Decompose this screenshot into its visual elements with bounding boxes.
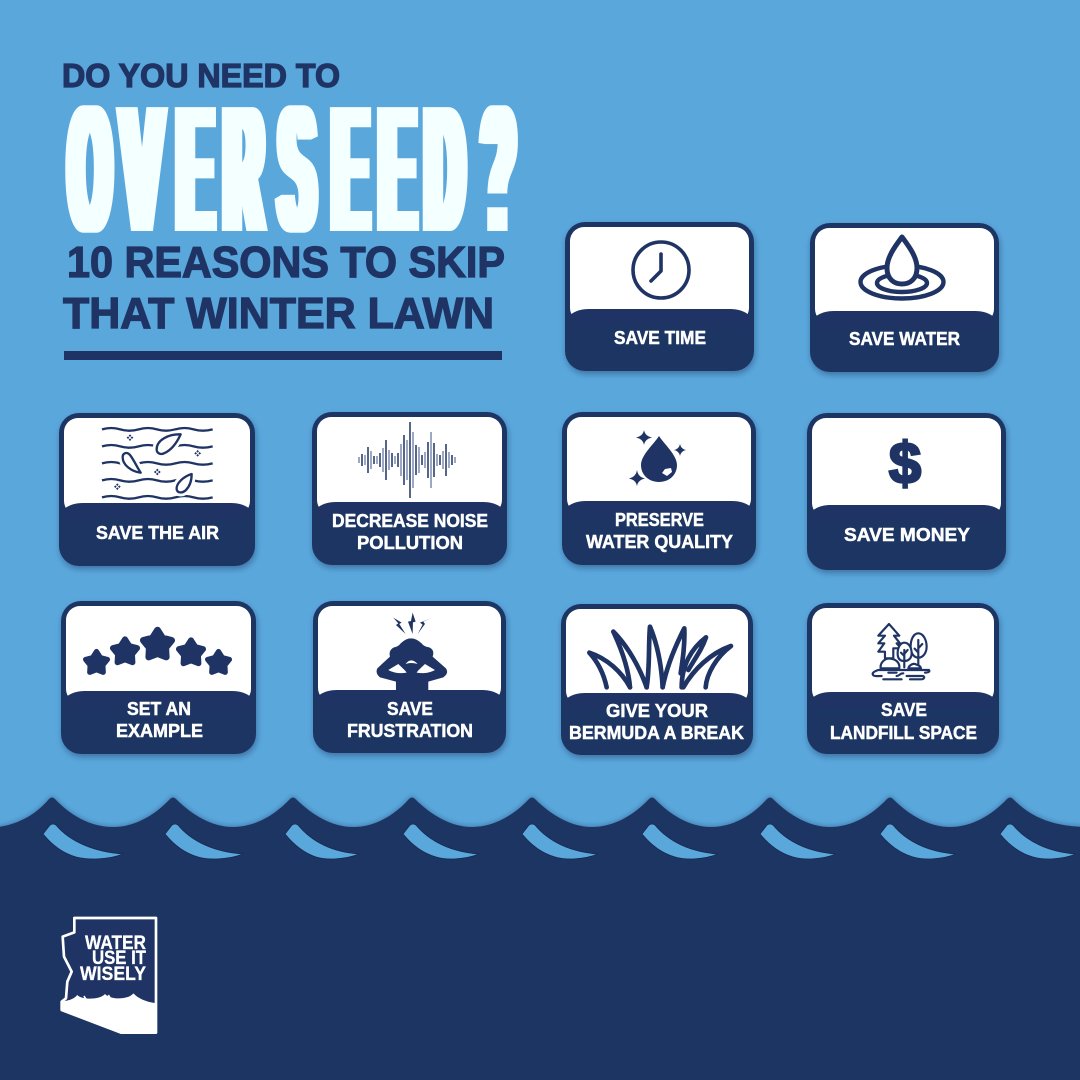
label: save frustration: [347, 698, 473, 741]
label: save water: SAVE WATER: [849, 328, 960, 349]
heading: do you need to: DO YOU NEED TO: [62, 57, 340, 94]
label: save frustration: SAVE: [387, 698, 433, 719]
label: give your bermuda a break: BERMUDA A BREAK: [569, 722, 745, 743]
subheading line one: 10 REASONS TO SKIP: [67, 238, 505, 287]
label: preserve water quality: [586, 509, 734, 552]
title rule: [64, 351, 502, 360]
icon: frustrated person: [377, 613, 447, 690]
card: save time: [565, 222, 754, 371]
icon: air waves and leaves: [102, 428, 213, 499]
label: decrease noise pollution: [332, 510, 488, 553]
title block: [62, 57, 514, 360]
logo: water use it wisely: [62, 918, 157, 1033]
water waves: [0, 798, 1080, 1080]
label: preserve water quality: PRESERVE: [615, 509, 704, 530]
heading: overseed: O: [70, 69, 110, 270]
card: save landfill space: [807, 603, 999, 754]
label: save time: SAVE TIME: [614, 327, 706, 348]
card: set an example: [61, 601, 256, 754]
logo wordmark: WISELY: [80, 964, 146, 985]
label: set an example: EXAMPLE: [116, 720, 203, 741]
heading: overseed: V: [122, 69, 162, 270]
icon: sparkling water drop: [629, 430, 686, 486]
heading: overseed: ERSEED?: [178, 69, 514, 270]
icon: trees and land: [873, 624, 929, 679]
icon: sound wave: [359, 422, 455, 498]
label: set an example: [116, 698, 203, 741]
label: save the air: SAVE THE AIR: [96, 522, 219, 543]
card: save the air: [59, 413, 255, 566]
label: save landfill space: [830, 699, 977, 743]
label: save frustration: FRUSTRATION: [347, 720, 473, 741]
icon: five stars: [86, 630, 229, 672]
label: save money: SAVE MONEY: [844, 524, 971, 545]
label: set an example: SET AN: [127, 698, 191, 719]
label: decrease noise pollution: DECREASE NOISE: [332, 510, 488, 531]
icon: clock: [633, 242, 689, 298]
card: preserve water quality: [562, 412, 756, 565]
label: give your bermuda a break: GIVE YOUR: [606, 700, 708, 721]
card: save water: [810, 223, 999, 372]
logo wordmark: [80, 933, 146, 985]
label: decrease noise pollution: POLLUTION: [357, 532, 463, 553]
label: save landfill space: LANDFILL SPACE: [830, 722, 977, 743]
label: preserve water quality: WATER QUALITY: [586, 531, 734, 552]
subheading line two: THAT WINTER LAWN: [63, 289, 494, 338]
label: save landfill space: SAVE: [881, 699, 927, 720]
logo wordmark: WATER: [85, 933, 146, 954]
label: give your bermuda a break: [569, 700, 745, 743]
icon: water drop and ripples: [860, 237, 944, 298]
logo wordmark: USE IT: [92, 948, 146, 969]
icon: grass blades: [589, 627, 731, 687]
card: save money: [807, 413, 1006, 570]
card: give your bermuda a break: [561, 604, 753, 755]
wave highlights: [43, 824, 1076, 859]
card: save frustration: [313, 601, 506, 753]
card: decrease noise pollution: [312, 412, 507, 565]
icon: dollar sign: $: [889, 431, 921, 496]
